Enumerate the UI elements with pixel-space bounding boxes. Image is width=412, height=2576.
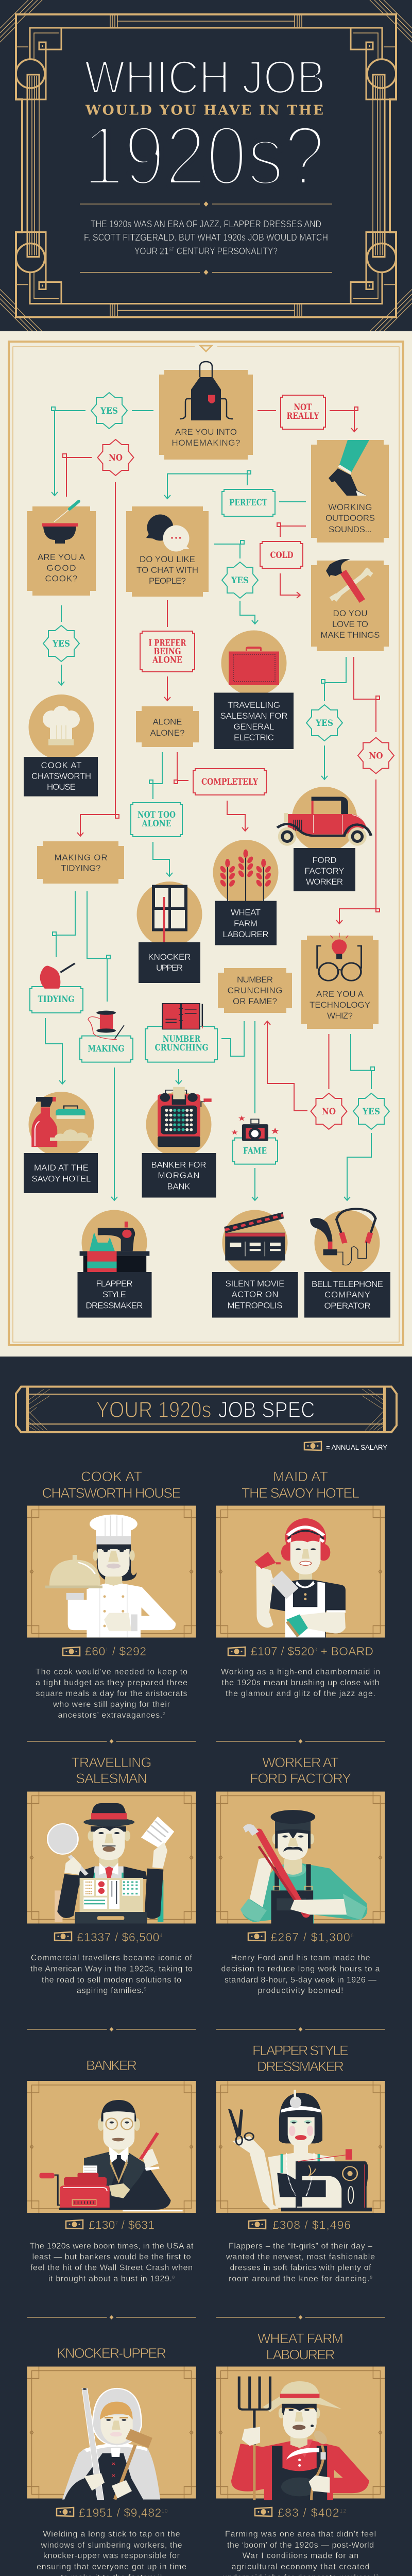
description: Henry Ford and his team made the bbox=[231, 1954, 370, 1962]
description: who were still paying for their bbox=[53, 1700, 170, 1709]
badge: i prefer being alone bbox=[140, 631, 195, 672]
banner: your 1920s job spec bbox=[16, 1386, 397, 1432]
description: square meals a day for the aristocrats bbox=[36, 1689, 187, 1698]
salary: + BOARD bbox=[317, 1645, 373, 1658]
description: a tight budget as they prepared three bbox=[36, 1679, 187, 1687]
label: DRESSMAKER bbox=[85, 1301, 143, 1311]
label: SILENT MOVIE bbox=[226, 1279, 284, 1289]
heading bbox=[71, 1755, 151, 1786]
illustration: maid bbox=[216, 1505, 385, 1637]
heading bbox=[250, 1755, 351, 1786]
description: Flappers – the “It-girls” of their day – bbox=[229, 2242, 372, 2250]
salary: 12 bbox=[340, 2509, 346, 2514]
intro text: F. SCOTT FITZGERALD. BUT WHAT 1920s JOB WOULD MATCH bbox=[84, 232, 328, 243]
label: MORGAN bbox=[158, 1171, 200, 1180]
label: ELECTRIC bbox=[234, 733, 274, 742]
description: decision to reduce long work hours to a bbox=[221, 1965, 380, 1973]
salary: £1951 / $9,482 bbox=[79, 2506, 161, 2519]
badge: yes bbox=[222, 562, 258, 598]
salary: £83 / $402 bbox=[278, 2506, 339, 2519]
icon: mixing bowl bbox=[42, 501, 79, 544]
description: room around the knee for dancing. bbox=[229, 2275, 370, 2283]
description: The cook would’ve needed to keep to bbox=[36, 1668, 187, 1676]
divider bbox=[27, 2027, 385, 2031]
job: travelling salesman bbox=[214, 631, 294, 749]
description: standard 8-hour, 5-day week in 1926 — bbox=[225, 1976, 376, 1985]
badge: no: NO bbox=[109, 453, 123, 463]
card: working outdoors: WORKING bbox=[329, 502, 372, 512]
icon: apron bbox=[180, 362, 233, 420]
icon: hammer and wrench bbox=[326, 559, 372, 603]
description: the 1920s meant brushing up close with bbox=[221, 1679, 379, 1687]
description bbox=[37, 2530, 186, 2576]
description: ensuring that everyone got up in time bbox=[37, 2563, 186, 2571]
description: 9 bbox=[370, 2275, 373, 2280]
intro text: YOUR 21 bbox=[134, 246, 174, 257]
job card: cook bbox=[27, 1469, 196, 1720]
salary: 7 bbox=[115, 2221, 118, 2227]
icon: suitcase bbox=[229, 647, 279, 685]
card: are you a technology whiz: ARE YOU A bbox=[316, 989, 364, 999]
badge: fame bbox=[231, 1115, 279, 1164]
label: MAID AT THE bbox=[34, 1163, 89, 1173]
badge: yes: YES bbox=[52, 639, 70, 649]
badge: yes bbox=[306, 705, 342, 741]
job: silent movie actor bbox=[212, 1210, 298, 1318]
badge: not too alone: NOT TOO bbox=[138, 810, 176, 820]
label: METROPOLIS bbox=[228, 1301, 282, 1311]
description bbox=[226, 2242, 375, 2283]
heading: COOK AT bbox=[81, 1469, 142, 1484]
description: agricultural economy that created bbox=[232, 2563, 370, 2571]
panel: hero bbox=[0, 0, 412, 332]
legend: annual salary bbox=[304, 1442, 388, 1451]
job card: knocker upper bbox=[27, 2346, 196, 2576]
label: FLAPPER bbox=[96, 1279, 133, 1289]
badge: yes: YES bbox=[231, 575, 249, 585]
card: are you a good cook bbox=[27, 501, 96, 596]
job card: flapper dressmaker bbox=[216, 2043, 385, 2283]
card: are you a good cook: GOOD bbox=[46, 563, 76, 573]
salary bbox=[228, 1645, 373, 1658]
label: GENERAL bbox=[234, 722, 274, 732]
badge: number crunching: CRUNCHING bbox=[154, 1043, 208, 1053]
salary: 4 bbox=[160, 1933, 163, 1939]
card: are you a good cook: COOK? bbox=[45, 574, 77, 584]
title: WHICH JOB bbox=[84, 52, 325, 104]
badge: perfect bbox=[222, 489, 275, 516]
label: OPERATOR bbox=[324, 1301, 371, 1311]
job card: ford worker bbox=[216, 1755, 385, 1995]
label: TRAVELLING bbox=[228, 700, 280, 710]
title: WOULD YOU HAVE IN THE bbox=[85, 102, 323, 118]
heading: FORD FACTORY bbox=[250, 1771, 351, 1786]
badge: no bbox=[98, 439, 134, 476]
salary bbox=[255, 2506, 346, 2519]
card: are you into homemaking bbox=[159, 362, 253, 460]
heading: FLAPPER STYLE bbox=[252, 2043, 349, 2058]
intro text bbox=[84, 219, 328, 257]
card: number crunching or fame: CRUNCHING bbox=[228, 986, 282, 995]
card: number crunching or fame bbox=[218, 968, 292, 1013]
label: BANK bbox=[167, 1182, 191, 1192]
label bbox=[77, 1272, 151, 1318]
badge: yes bbox=[91, 393, 127, 429]
badge: making bbox=[80, 1011, 133, 1062]
job: knocker upper bbox=[137, 882, 202, 983]
banner: your 1920s job spec: YOUR 1920s bbox=[96, 1397, 211, 1422]
heading: WORKER AT bbox=[262, 1755, 339, 1770]
badge: not really bbox=[281, 395, 325, 429]
badge: i prefer being alone: I PREFER bbox=[148, 638, 186, 648]
illustration: cook bbox=[27, 1505, 196, 1637]
card: number crunching or fame: OR FAME? bbox=[233, 996, 277, 1006]
badge: making: MAKING bbox=[88, 1044, 125, 1054]
badge: no bbox=[358, 738, 394, 774]
icon: cleaning products bbox=[31, 1097, 92, 1147]
art deco frame bbox=[0, 0, 412, 332]
heading bbox=[242, 1469, 359, 1501]
description: Farming was one area that didn’t feel bbox=[225, 2530, 376, 2539]
label: KNOCKER bbox=[148, 952, 191, 962]
description: feel the hit of the Wall Street Crash when bbox=[30, 2264, 193, 2272]
divider bbox=[80, 270, 332, 275]
badge: yes: YES bbox=[362, 1107, 380, 1116]
card: do you like to chat: PEOPLE? bbox=[149, 576, 186, 586]
label bbox=[212, 1272, 298, 1318]
job: maid at the savoy bbox=[24, 1092, 98, 1193]
salary: £267 / $1,300 bbox=[271, 1930, 350, 1944]
icon: headset and telephone bbox=[310, 1209, 376, 1265]
intro text: CENTURY PERSONALITY? bbox=[174, 246, 278, 257]
illustration: flapper bbox=[216, 2081, 385, 2213]
badge: number crunching bbox=[145, 1004, 217, 1062]
label bbox=[304, 1272, 390, 1318]
panel: job spec bbox=[0, 1357, 412, 2576]
icon: bulb and glasses bbox=[317, 933, 362, 980]
label: WHEAT bbox=[231, 908, 261, 918]
badge: cold bbox=[260, 541, 303, 568]
heading: BANKER bbox=[86, 2058, 137, 2073]
divider bbox=[27, 1739, 385, 1743]
salary: 6 bbox=[351, 1933, 354, 1939]
badge: cold: COLD bbox=[270, 550, 294, 560]
heading: TRAVELLING bbox=[71, 1755, 151, 1770]
job: flapper style dressmaker bbox=[77, 1210, 151, 1318]
label: SAVOY HOTEL bbox=[32, 1174, 91, 1184]
icon: clapperboard bbox=[224, 1212, 285, 1261]
card: working outdoors: SOUNDS... bbox=[329, 524, 372, 534]
label: UPPER bbox=[156, 963, 183, 973]
badge: tidying: TIDYING bbox=[38, 994, 74, 1004]
title bbox=[83, 52, 325, 203]
label: WORKER bbox=[306, 877, 343, 887]
description: the American Way in the 1920s, taking to bbox=[30, 1965, 193, 1973]
connectors bbox=[45, 407, 380, 1200]
description: 2 bbox=[163, 1711, 165, 1716]
job: cook at chatsworth bbox=[24, 694, 98, 796]
card: do you love to make things: DO YOU bbox=[333, 608, 368, 618]
salary bbox=[63, 1645, 146, 1658]
job: ford factory worker bbox=[277, 787, 371, 891]
job: banker bbox=[142, 1087, 216, 1197]
card: are you a good cook: ARE YOU A bbox=[38, 552, 85, 562]
description: Wielding a long stick to tap on the bbox=[43, 2530, 180, 2539]
illustration: farmer bbox=[216, 2367, 385, 2500]
label bbox=[214, 692, 294, 749]
card: do you love to make things bbox=[311, 559, 389, 651]
description: aspiring families. bbox=[77, 1987, 144, 1995]
description: the glamour and glitz of the jazz age. bbox=[226, 1689, 375, 1698]
card: are you into homemaking: HOMEMAKING? bbox=[172, 438, 240, 448]
salary bbox=[66, 2218, 154, 2232]
badge: not really: NOT bbox=[294, 402, 312, 412]
badge: yes: YES bbox=[315, 718, 333, 728]
card: making or tidying: TIDYING? bbox=[61, 863, 101, 873]
description: War I conditions made for an bbox=[243, 2552, 358, 2561]
card: alone alone: ALONE? bbox=[150, 728, 184, 738]
icon: speech bubbles bbox=[146, 514, 190, 551]
label bbox=[142, 1153, 216, 1197]
flowchart frame bbox=[9, 342, 403, 1345]
badge: yes bbox=[43, 625, 79, 662]
description bbox=[222, 2530, 379, 2576]
label bbox=[24, 757, 98, 796]
badge: not too alone: ALONE bbox=[142, 819, 171, 828]
card: working outdoors: OUTDOORS bbox=[325, 513, 375, 523]
icon: typewriter bbox=[158, 1087, 212, 1147]
description bbox=[221, 1954, 380, 1995]
panel: flowchart bbox=[0, 331, 412, 1357]
icon: thread spool bbox=[88, 1011, 124, 1040]
icon: wheat bbox=[219, 850, 272, 901]
badge: fame: FAME bbox=[243, 1146, 267, 1156]
flowchart background bbox=[0, 331, 412, 1357]
job card: travelling salesman bbox=[27, 1755, 196, 1995]
description bbox=[30, 2242, 194, 2283]
description: dresses in soft fabrics with plenty of bbox=[230, 2264, 371, 2272]
description: the road to sell modern solutions to bbox=[42, 1976, 181, 1985]
badge: no bbox=[311, 1093, 347, 1129]
icon: ledger bbox=[162, 1004, 203, 1029]
description bbox=[30, 1954, 193, 1995]
job: bell telephone operator bbox=[304, 1209, 390, 1318]
label: FORD bbox=[312, 855, 337, 865]
label: FACTORY bbox=[305, 866, 344, 876]
heading: MAID AT bbox=[273, 1469, 328, 1484]
salary: £1337 / $6,500 bbox=[77, 1930, 159, 1944]
background: navy hero bbox=[0, 0, 412, 331]
icon: sewing machine bbox=[80, 1222, 149, 1276]
heading: SALESMAN bbox=[76, 1771, 147, 1786]
badge: i prefer being alone: ALONE bbox=[152, 655, 182, 665]
label: ACTOR ON bbox=[232, 1290, 278, 1299]
title: 1920s? bbox=[83, 108, 325, 203]
label: COMPANY bbox=[324, 1290, 370, 1300]
card: alone alone: ALONE bbox=[152, 717, 182, 726]
heading bbox=[258, 2331, 344, 2363]
heading: KNOCKER-UPPER bbox=[57, 2346, 166, 2361]
card: making or tidying: MAKING OR bbox=[55, 853, 107, 862]
heading bbox=[42, 1469, 181, 1501]
heading: THE SAVOY HOTEL bbox=[242, 1485, 359, 1501]
icon: window bbox=[152, 885, 187, 942]
label: COOK AT bbox=[41, 760, 81, 770]
label: SALESMAN FOR bbox=[220, 711, 287, 721]
salary: £107 / $520 bbox=[251, 1645, 314, 1658]
label bbox=[294, 848, 355, 891]
heading bbox=[252, 2043, 349, 2074]
salary: 3 bbox=[314, 1647, 317, 1653]
heading: LABOURER bbox=[266, 2347, 335, 2363]
heading: CHATSWORTH HOUSE bbox=[42, 1485, 181, 1501]
card: making or tidying bbox=[37, 841, 124, 884]
illustration: salesman bbox=[27, 1792, 196, 1924]
badge: number crunching: NUMBER bbox=[163, 1034, 200, 1044]
description: productivity boomed! bbox=[258, 1987, 343, 1995]
description: ancestors’ extravagances. bbox=[58, 1711, 162, 1720]
label bbox=[139, 942, 200, 983]
badge: completely: COMPLETELY bbox=[201, 777, 258, 787]
card: are you into homemaking: ARE YOU INTO bbox=[175, 427, 237, 437]
description: The 1920s were boom times, in the USA at bbox=[30, 2242, 194, 2250]
salary: £308 / $1,496 bbox=[272, 2218, 351, 2232]
badge: i prefer being alone: BEING bbox=[153, 647, 181, 656]
illustration: knocker upper bbox=[27, 2367, 196, 2499]
card: are you a technology whiz bbox=[301, 933, 379, 1029]
card: working outdoors bbox=[311, 440, 389, 543]
badge: tidying bbox=[30, 963, 83, 1013]
description: the ‘boom’ of the 1920s — post-World bbox=[227, 2541, 374, 2550]
icon: car bbox=[277, 797, 371, 846]
badge: no: NO bbox=[322, 1107, 336, 1116]
banner: your 1920s job spec: JOB SPEC bbox=[218, 1397, 315, 1422]
salary: £130 bbox=[89, 2218, 115, 2232]
salary: / $631 bbox=[118, 2218, 154, 2232]
icon: chef hat bbox=[43, 706, 80, 745]
card: do you love to make things: MAKE THINGS bbox=[320, 630, 380, 640]
intro text: ST bbox=[168, 247, 174, 252]
divider bbox=[80, 201, 332, 207]
description: wanted the newest, most fashionable bbox=[226, 2253, 375, 2262]
badge: yes: YES bbox=[100, 406, 118, 416]
description: Commercial travellers became iconic of bbox=[31, 1954, 193, 1962]
description bbox=[36, 1668, 187, 1720]
description: windows of slumbering workers, the bbox=[40, 2541, 182, 2550]
badge: not too alone bbox=[131, 803, 182, 837]
divider bbox=[27, 2315, 385, 2319]
description: 8 bbox=[173, 2275, 175, 2280]
card: number crunching or fame: NUMBER bbox=[237, 975, 273, 985]
description: least — but bankers would be the first to bbox=[32, 2253, 191, 2262]
card: are you a technology whiz: WHIZ? bbox=[327, 1011, 353, 1021]
salary: 10 bbox=[162, 2509, 168, 2514]
label: HOUSE bbox=[47, 782, 76, 792]
job card: wheat farm labourer bbox=[216, 2331, 385, 2576]
card: are you a technology whiz: TECHNOLOGY bbox=[310, 1000, 370, 1010]
job spec background bbox=[0, 1357, 412, 2576]
label: LABOURER bbox=[222, 929, 269, 939]
description: 5 bbox=[144, 1987, 147, 1992]
icon: camera bbox=[231, 1115, 279, 1141]
badge: no: NO bbox=[369, 751, 383, 760]
label: BANKER FOR bbox=[151, 1160, 206, 1170]
label bbox=[24, 1153, 98, 1193]
badge: perfect: PERFECT bbox=[229, 498, 268, 507]
salary: £60 bbox=[85, 1645, 105, 1658]
legend: annual salary: = ANNUAL SALARY bbox=[326, 1443, 388, 1451]
icon: feather duster bbox=[40, 963, 75, 989]
salary: 1 bbox=[106, 1647, 109, 1653]
description: it brought about a bust in 1929. bbox=[48, 2275, 172, 2283]
label: BELL TELEPHONE bbox=[312, 1279, 383, 1289]
card: do you like to chat: TO CHAT WITH bbox=[136, 565, 198, 575]
description: Working as a high-end chambermaid in bbox=[221, 1668, 380, 1676]
heading: WHEAT FARM bbox=[258, 2331, 344, 2346]
illustration: factory worker bbox=[216, 1792, 385, 1924]
badge: not really: REALLY bbox=[286, 411, 319, 421]
badge: yes bbox=[353, 1093, 389, 1129]
label: STYLE bbox=[102, 1290, 126, 1299]
job: wheat farm labourer bbox=[213, 840, 278, 945]
badge: completely bbox=[193, 769, 266, 795]
card: do you love to make things: LOVE TO bbox=[332, 619, 368, 629]
label bbox=[215, 901, 277, 945]
heading: DRESSMAKER bbox=[257, 2059, 344, 2074]
icon: walking shoe bbox=[329, 440, 369, 496]
description: knocker-upper was responsible for bbox=[43, 2552, 180, 2561]
label: FARM bbox=[234, 919, 258, 928]
card: do you like to chat: DO YOU LIKE bbox=[140, 554, 195, 564]
salary: / $292 bbox=[109, 1645, 146, 1658]
illustration: banker bbox=[27, 2081, 196, 2213]
description bbox=[221, 1668, 380, 1698]
job card: maid bbox=[216, 1469, 385, 1698]
label: CHATSWORTH bbox=[31, 771, 91, 781]
card: alone alone bbox=[136, 706, 199, 747]
card: do you like to chat bbox=[126, 506, 209, 597]
intro text: THE 1920s WAS AN ERA OF JAZZ, FLAPPER DRESSES AND bbox=[91, 219, 321, 229]
job card: banker bbox=[27, 2058, 196, 2283]
